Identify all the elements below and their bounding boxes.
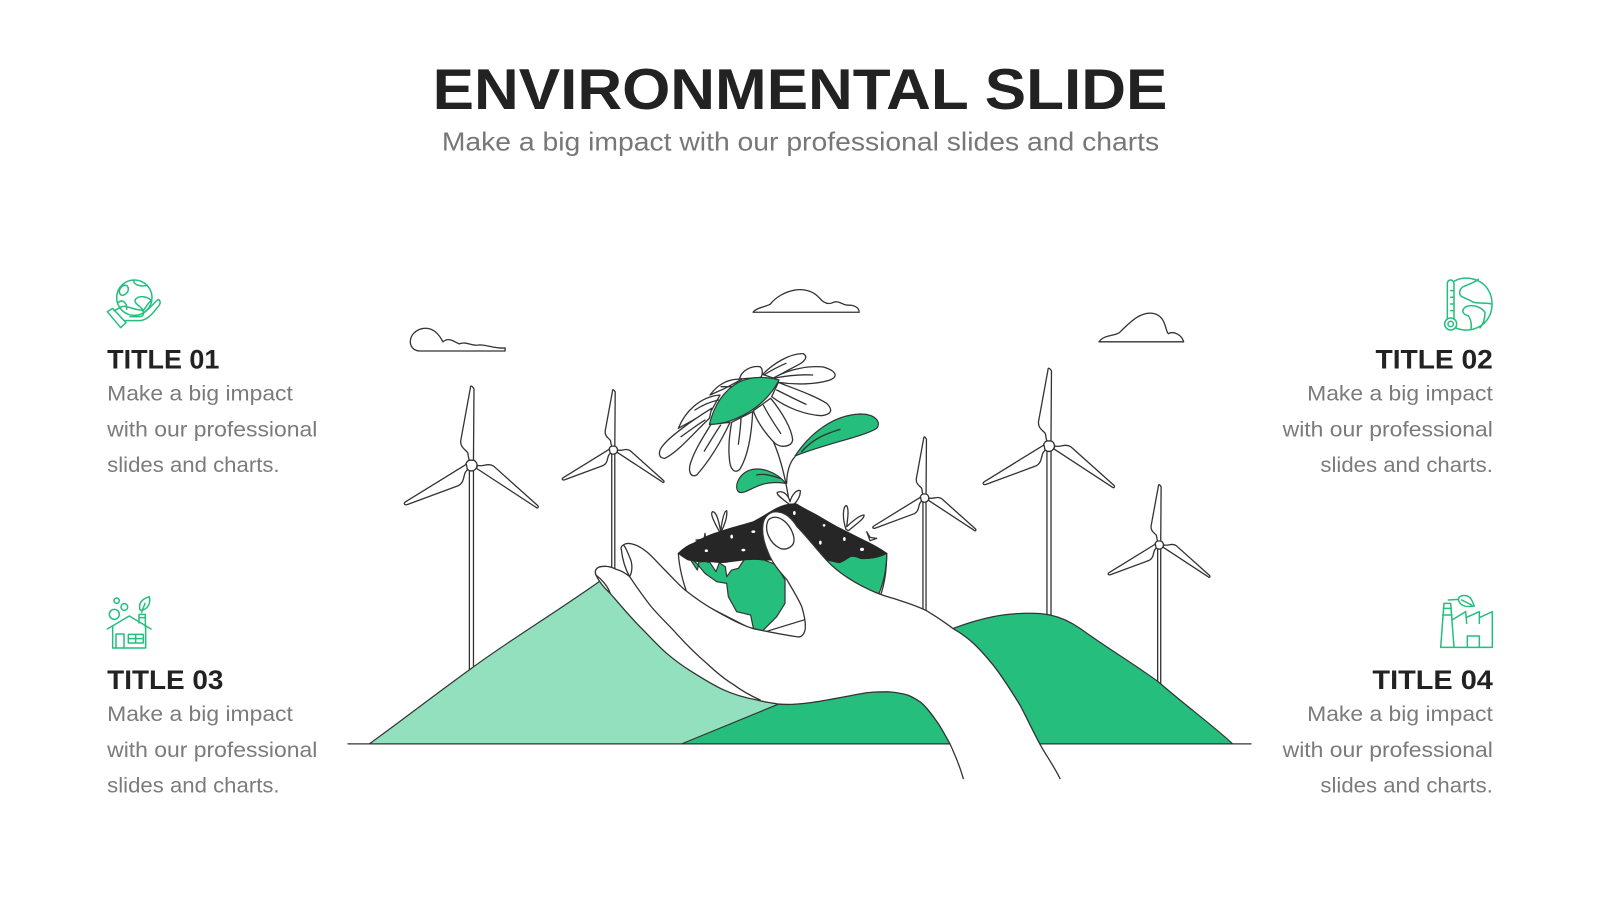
heading: TITLE 03 bbox=[107, 665, 223, 695]
left leaf bbox=[737, 469, 786, 493]
icon: hand holding globe bbox=[107, 280, 160, 328]
wind turbine 2 bbox=[562, 390, 664, 602]
body text: with our professional bbox=[1282, 739, 1493, 762]
heading: TITLE 02 bbox=[1376, 344, 1493, 374]
hill: middle green bbox=[682, 663, 980, 744]
stems bbox=[773, 442, 795, 497]
central illustration bbox=[348, 290, 1251, 779]
heading: TITLE 01 bbox=[107, 344, 220, 374]
body text: Make a big impact bbox=[107, 703, 293, 726]
body text bbox=[106, 383, 317, 477]
body text: with our professional bbox=[106, 739, 317, 762]
panel: title 02 bbox=[1282, 278, 1493, 477]
soil seeds bbox=[705, 511, 864, 552]
cloud left bbox=[410, 328, 505, 351]
panel: title 03 bbox=[106, 597, 317, 798]
icon: factory with leaf bbox=[1441, 596, 1492, 647]
hand bbox=[595, 512, 1060, 779]
hand silhouette bbox=[595, 512, 1060, 779]
leaf veins bbox=[757, 429, 840, 478]
body text: slides and charts. bbox=[107, 775, 280, 798]
wind turbine 1 bbox=[404, 386, 538, 673]
body text: slides and charts. bbox=[107, 454, 280, 477]
cloud middle bbox=[753, 290, 859, 312]
body text: with our professional bbox=[106, 418, 317, 441]
body text: Make a big impact bbox=[1307, 703, 1493, 726]
earth bowl bbox=[678, 553, 887, 633]
finger tip arcs bbox=[596, 545, 632, 593]
heading: TITLE 04 bbox=[1372, 665, 1493, 695]
ground line bbox=[348, 743, 1251, 745]
body text bbox=[106, 703, 317, 798]
body text: slides and charts. bbox=[1320, 775, 1493, 798]
wind turbine 5 bbox=[1108, 485, 1210, 689]
body text: Make a big impact bbox=[107, 383, 293, 406]
petal veins bbox=[681, 363, 813, 451]
body text bbox=[1282, 383, 1493, 477]
right leaf bbox=[795, 414, 878, 456]
hill: light green bbox=[369, 580, 806, 744]
body text bbox=[1282, 703, 1493, 798]
panel: title 01 bbox=[106, 280, 317, 477]
body text: with our professional bbox=[1282, 418, 1493, 441]
earth continent right bbox=[823, 553, 887, 595]
soil bbox=[678, 504, 887, 563]
wind turbine 4 bbox=[983, 368, 1114, 622]
body text: slides and charts. bbox=[1320, 454, 1493, 477]
subtitle: Make a big impact with our professional slides and charts bbox=[442, 129, 1159, 157]
thumb nail bbox=[767, 517, 794, 549]
flower bbox=[659, 354, 835, 476]
wind turbine 3 bbox=[873, 437, 976, 622]
body text: Make a big impact bbox=[1307, 383, 1493, 406]
finger separator bbox=[630, 577, 760, 700]
panel: title 04 bbox=[1282, 596, 1493, 798]
hill: right green bbox=[939, 613, 1233, 744]
icon: thermometer and globe bbox=[1445, 278, 1492, 330]
icon: eco house bbox=[107, 597, 151, 648]
flower petals bbox=[659, 354, 835, 476]
title: ENVIRONMENTAL SLIDE bbox=[433, 58, 1167, 122]
plant, soil and earth bbox=[678, 414, 887, 633]
sprouts bbox=[696, 490, 877, 543]
earth continent left bbox=[688, 557, 785, 632]
flower centre leaf bbox=[709, 377, 779, 424]
cloud right bbox=[1099, 313, 1184, 342]
